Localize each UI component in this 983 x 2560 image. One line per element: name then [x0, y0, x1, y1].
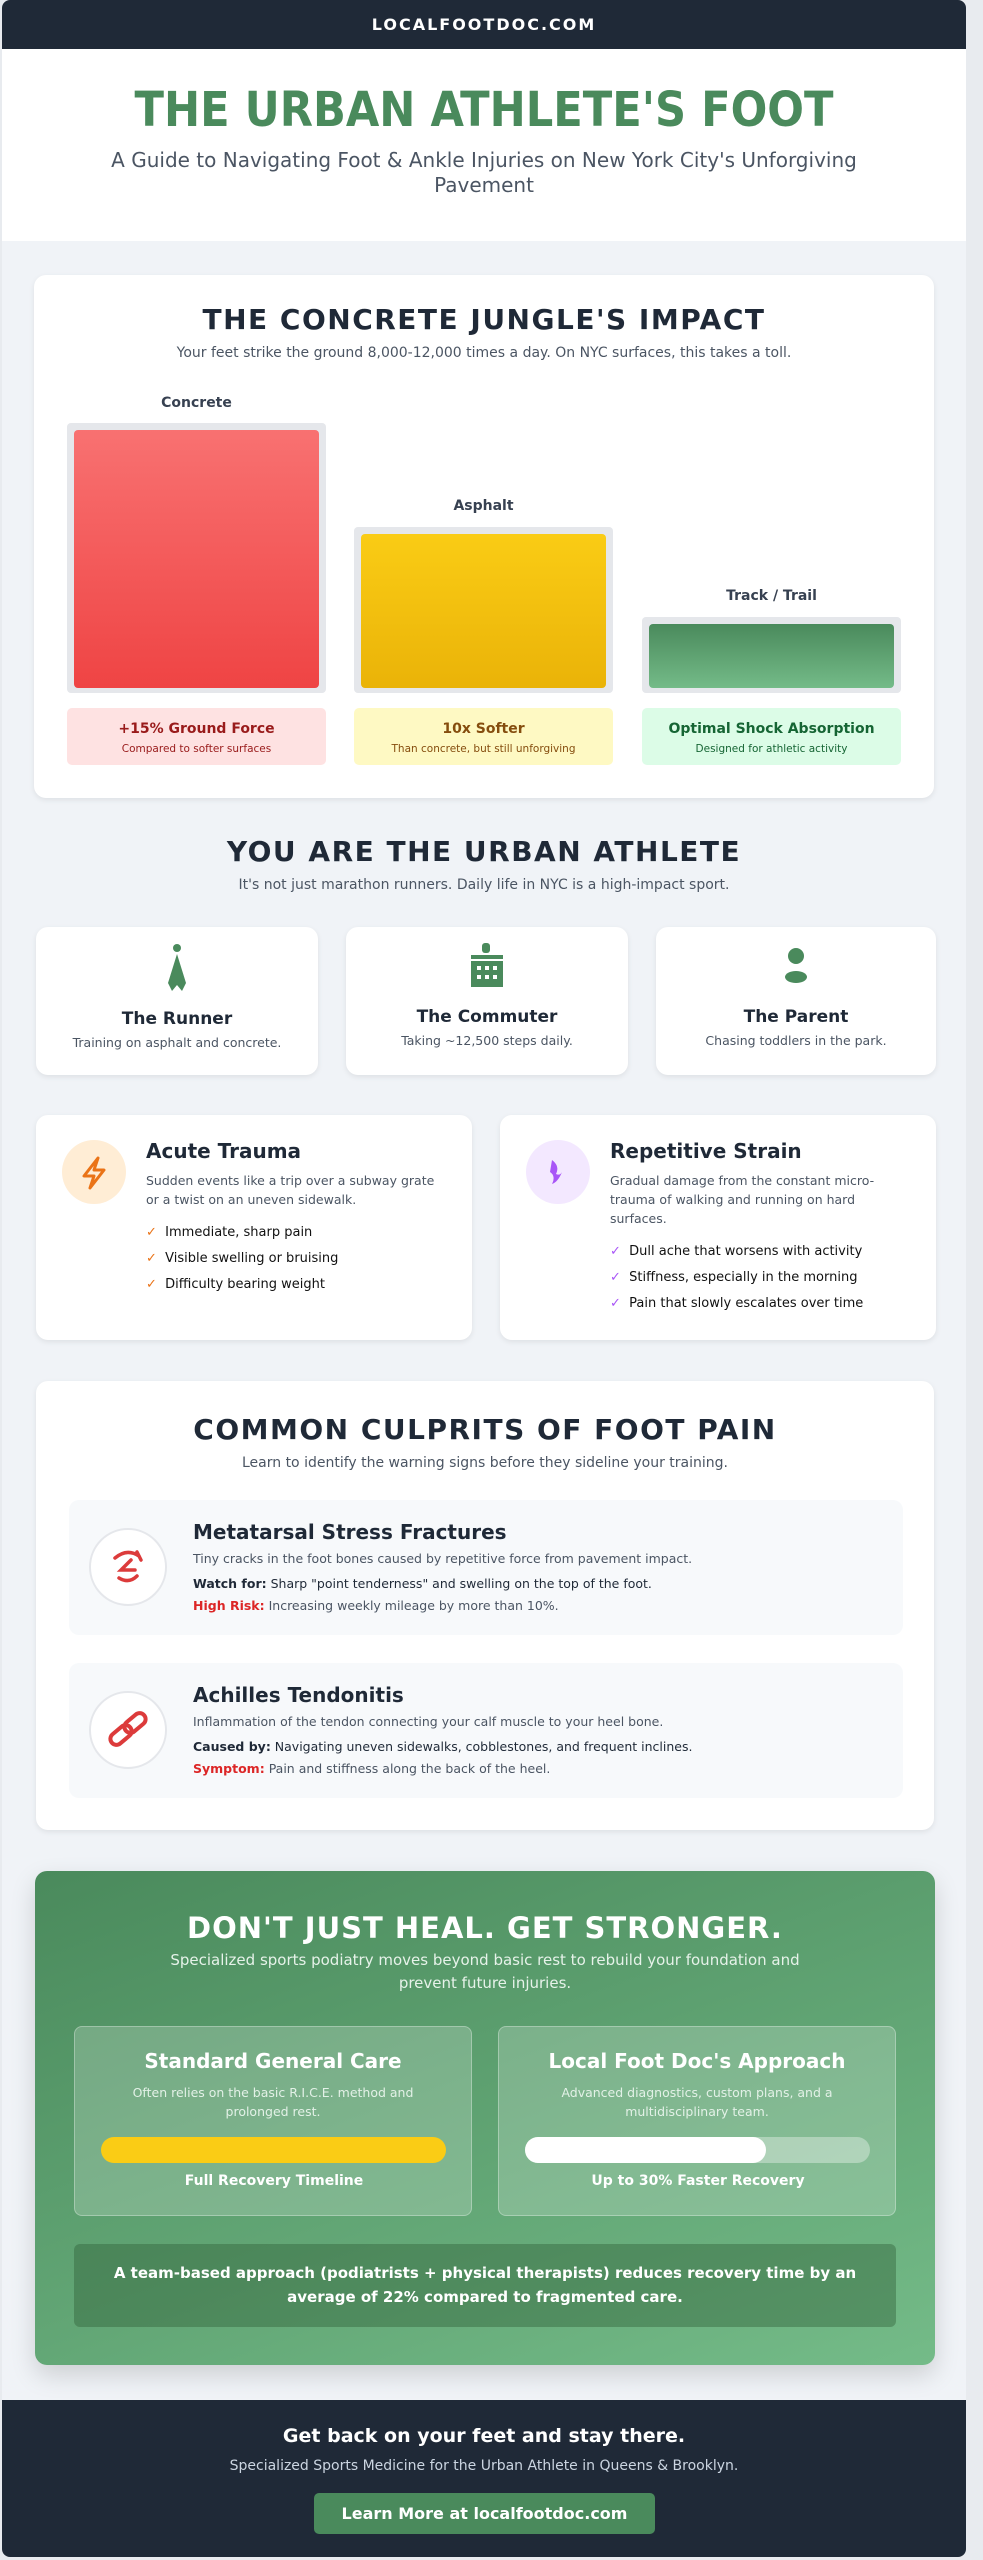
stat: concrete — [67, 708, 326, 765]
item: stress fractures: Tiny cracks in the foot bones caused by repetitive force from pavement impact. — [193, 1551, 692, 1566]
item: stress fractures: Metatarsal Stress Fractures — [193, 1520, 507, 1544]
bar chart: Concrete — [161, 395, 232, 411]
card: acute trauma: Acute Trauma — [146, 1139, 301, 1163]
card: acute trauma: Sudden events like a trip over a subway grate or a twist on an uneven sidewalk. — [146, 1173, 434, 1207]
card: acute trauma: ✓ Visible swelling or bruising — [146, 1251, 338, 1266]
bar chart: Track / Trail — [726, 588, 817, 604]
card: acute trauma: ✓ Immediate, sharp pain — [146, 1225, 312, 1240]
stat: asphalt — [354, 708, 613, 765]
item: achilles: Inflammation of the tendon connecting your calf muscle to your heel bone. — [193, 1714, 663, 1729]
culprits subtitle: Learn to identify the warning signs before they sideline your training. — [242, 1455, 728, 1471]
card: commuter: Taking ~12,500 steps daily. — [401, 1033, 573, 1048]
stat: asphalt: 10x Softer — [442, 721, 525, 737]
bar: full timeline — [101, 2137, 446, 2163]
card: acute trauma — [36, 1115, 472, 1340]
panel: culprits — [36, 1381, 934, 1830]
card: parent: The Parent — [744, 1007, 848, 1027]
card: standard care — [74, 2026, 472, 2216]
card: parent — [656, 927, 936, 1075]
stat: track: Designed for athletic activity — [696, 743, 847, 755]
stat: track — [642, 708, 901, 765]
footer: Specialized Sports Medicine for the Urban Athlete in Queens & Brooklyn. — [230, 2458, 738, 2474]
top bar: LOCALFOOTDOC.COM — [372, 15, 596, 34]
card: local foot doc: Local Foot Doc's Approach — [548, 2049, 846, 2073]
title: THE URBAN ATHLETE'S FOOT — [135, 82, 833, 138]
panel: get stronger — [35, 1871, 935, 2365]
stat: asphalt: Than concrete, but still unforgiving — [392, 743, 575, 755]
card: repetitive strain: ✓ Dull ache that worsens with activity — [610, 1244, 862, 1259]
stronger heading: DON'T JUST HEAL. GET STRONGER. — [187, 1911, 783, 1945]
icon: building — [471, 943, 503, 987]
callout: team approach: A team-based approach (podiatrists + physical therapists) reduces recovery time by an average of 22% compared to fragmented care. — [114, 2264, 856, 2306]
card: standard care: Full Recovery Timeline — [185, 2173, 363, 2189]
stronger subtitle: Specialized sports podiatry moves beyond basic rest to rebuild your foundation and prevent future injuries. — [170, 1951, 800, 1992]
card: runner: The Runner — [122, 1009, 232, 1029]
hero — [2, 49, 966, 241]
panel: concrete impact — [34, 275, 934, 798]
card: runner — [36, 927, 318, 1075]
button: Learn More at localfootdoc.com — [342, 2504, 627, 2523]
culprits heading: COMMON CULPRITS OF FOOT PAIN — [193, 1413, 777, 1446]
icon: lightning — [62, 1140, 126, 1204]
callout: team approach — [74, 2244, 896, 2327]
card: commuter: The Commuter — [417, 1007, 557, 1027]
urban athlete heading: YOU ARE THE URBAN ATHLETE — [227, 835, 741, 868]
icon: runner — [168, 944, 186, 991]
subtitle: A Guide to Navigating Foot & Ankle Injuries on New York City's Unforgiving Pavement — [111, 148, 857, 197]
card: parent: Chasing toddlers in the park. — [705, 1033, 887, 1048]
item: stress fractures — [69, 1500, 903, 1635]
item: stress fractures: Watch for: Sharp "point tenderness" and swelling on the top of the foot. — [193, 1576, 652, 1591]
stat: track: Optimal Shock Absorption — [668, 721, 875, 737]
card: repetitive strain: ✓ Stiffness, especially in the morning — [610, 1270, 857, 1285]
item: stress fractures: High Risk: Increasing weekly mileage by more than 10%. — [193, 1598, 559, 1613]
card: repetitive strain: ✓ Pain that slowly escalates over time — [610, 1296, 863, 1311]
stat: concrete: Compared to softer surfaces — [122, 743, 271, 755]
card: standard care: Standard General Care — [144, 2049, 402, 2073]
urban athlete subtitle: It's not just marathon runners. Daily life in NYC is a high-impact sport. — [238, 877, 729, 893]
card: acute trauma: ✓ Difficulty bearing weight — [146, 1277, 325, 1292]
icon: moon — [526, 1140, 590, 1204]
impact heading: THE CONCRETE JUNGLE'S IMPACT — [202, 303, 765, 336]
bar chart: Asphalt — [453, 498, 514, 514]
card: local foot doc: Up to 30% Faster Recovery — [591, 2173, 805, 2189]
item: achilles — [69, 1663, 903, 1798]
card: repetitive strain — [500, 1115, 936, 1340]
icon: person — [785, 948, 807, 983]
button — [314, 2493, 655, 2534]
card: commuter — [346, 927, 628, 1075]
icon: tendon link — [89, 1691, 167, 1769]
card: repetitive strain: Repetitive Strain — [610, 1139, 802, 1163]
top bar — [2, 0, 966, 49]
card: local foot doc — [498, 2026, 896, 2216]
impact subtitle: Your feet strike the ground 8,000-12,000 times a day. On NYC surfaces, this takes a toll. — [177, 345, 791, 361]
item: achilles: Symptom: Pain and stiffness along the back of the heel. — [193, 1761, 550, 1776]
card: local foot doc: Advanced diagnostics, custom plans, and a multidisciplinary team. — [561, 2085, 833, 2119]
stat: concrete: +15% Ground Force — [118, 721, 275, 737]
bar: faster recovery — [525, 2137, 870, 2163]
icon: bone fracture — [89, 1528, 167, 1606]
item: achilles: Caused by: Navigating uneven sidewalks, cobblestones, and frequent inclines. — [193, 1739, 692, 1754]
bar chart — [67, 395, 901, 693]
footer: Get back on your feet and stay there. — [283, 2425, 685, 2447]
footer — [2, 2400, 966, 2557]
card: runner: Training on asphalt and concrete. — [73, 1035, 281, 1050]
card: repetitive strain: Gradual damage from the constant micro-trauma of walking and running on hard surfaces. — [610, 1173, 874, 1226]
card: standard care: Often relies on the basic R.I.C.E. method and prolonged rest. — [133, 2085, 413, 2119]
item: achilles: Achilles Tendonitis — [193, 1683, 404, 1707]
